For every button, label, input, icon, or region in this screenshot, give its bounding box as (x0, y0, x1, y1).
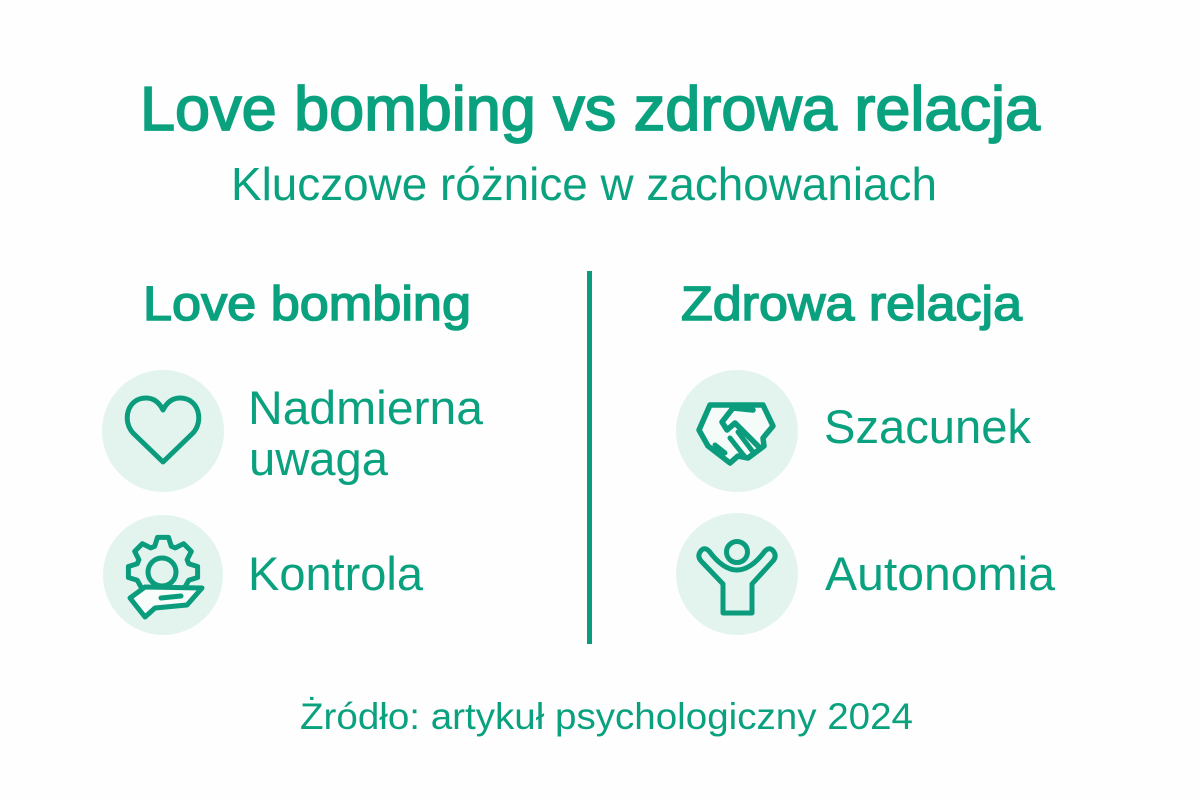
label: szacunek: Szacunek (824, 400, 1032, 453)
source note: Żródło: artykuł psychologiczny 2024 (300, 696, 913, 737)
item: kontrola (103, 515, 424, 635)
heading: love bombing: Love bombing (143, 278, 471, 331)
icon: heart (102, 370, 224, 492)
title: Love bombing vs zdrowa relacja (140, 75, 1041, 144)
label: autonomia: Autonomia (825, 547, 1056, 600)
label: nadmierna uwaga (248, 381, 484, 485)
label: nadmierna uwaga: uwaga (249, 432, 389, 485)
item: autonomia (676, 513, 1056, 635)
icon: handshake (676, 370, 798, 492)
label: kontrola: Kontrola (248, 547, 424, 600)
item: nadmierna uwaga (102, 370, 484, 492)
item: szacunek (676, 370, 1032, 492)
panel: love bombing (102, 278, 484, 635)
icon: person with raised arms (676, 513, 798, 635)
label: nadmierna uwaga: Nadmierna (248, 381, 484, 434)
subtitle: Kluczowe różnice w zachowaniach (231, 158, 937, 210)
panel: zdrowa relacja (676, 278, 1056, 635)
icon: gear over hand (103, 515, 223, 635)
heading: zdrowa relacja: Zdrowa relacja (681, 278, 1022, 331)
divider (587, 271, 592, 644)
